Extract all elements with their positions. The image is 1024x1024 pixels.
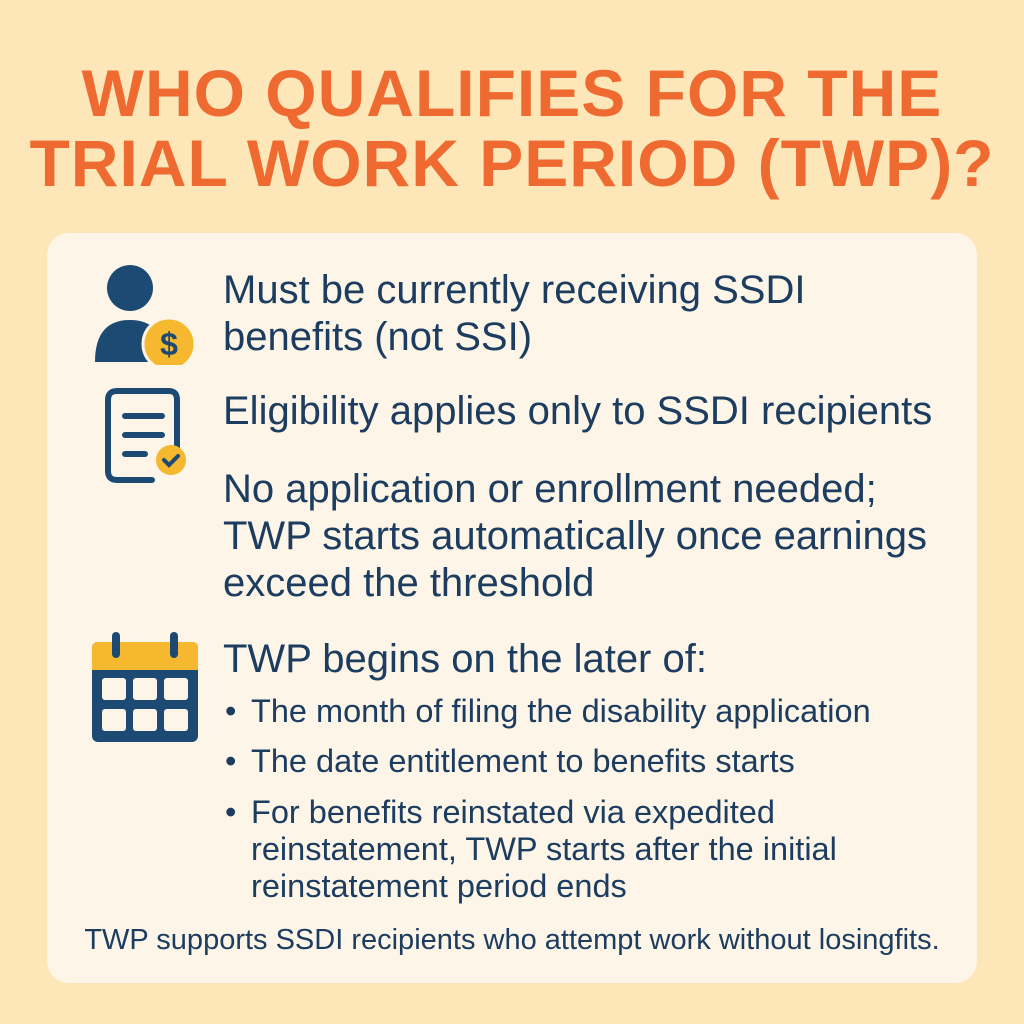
icon: calendar bbox=[92, 632, 198, 742]
icon: document with check bbox=[105, 388, 186, 483]
text: no application: exceed the threshold bbox=[223, 561, 594, 605]
title: WHO QUALIFIES FOR THE bbox=[82, 56, 942, 130]
panel: criteria: The date entitlement to benefits starts bbox=[251, 743, 795, 779]
text: SSDI benefits bbox=[223, 268, 805, 359]
text: TWP begins heading: TWP begins on the later of: bbox=[223, 637, 707, 681]
panel: criteria: The month of filing the disability application bbox=[251, 693, 871, 729]
text: no application: TWP starts automatically once earnings bbox=[223, 514, 927, 558]
text: eligibility: Eligibility applies only to SSDI recipients bbox=[223, 389, 932, 433]
panel: criteria: reinstatement, TWP starts after the initial bbox=[251, 831, 837, 867]
title: TRIAL WORK PERIOD (TWP)? bbox=[29, 126, 994, 200]
footer text: TWP supports SSDI recipients who attempt work without losingfits. bbox=[84, 924, 940, 956]
panel: criteria: reinstatement period ends bbox=[251, 868, 627, 904]
title bbox=[29, 56, 994, 200]
text: SSDI benefits: Must be currently receiving SSDI bbox=[223, 268, 805, 312]
panel: criteria bbox=[47, 233, 977, 983]
panel: criteria: • bbox=[225, 743, 236, 779]
panel: criteria: For benefits reinstated via expedited bbox=[251, 794, 775, 830]
text: SSDI benefits: benefits (not SSI) bbox=[223, 315, 532, 359]
text: no application: No application or enrollment needed; bbox=[223, 467, 877, 511]
icon: person with dollar bbox=[95, 265, 194, 365]
bullet list bbox=[225, 693, 871, 904]
panel: criteria: • bbox=[225, 693, 236, 729]
icon: person with dollar: $ bbox=[160, 326, 178, 362]
text: no application bbox=[223, 467, 927, 605]
panel: criteria: • bbox=[225, 794, 236, 830]
